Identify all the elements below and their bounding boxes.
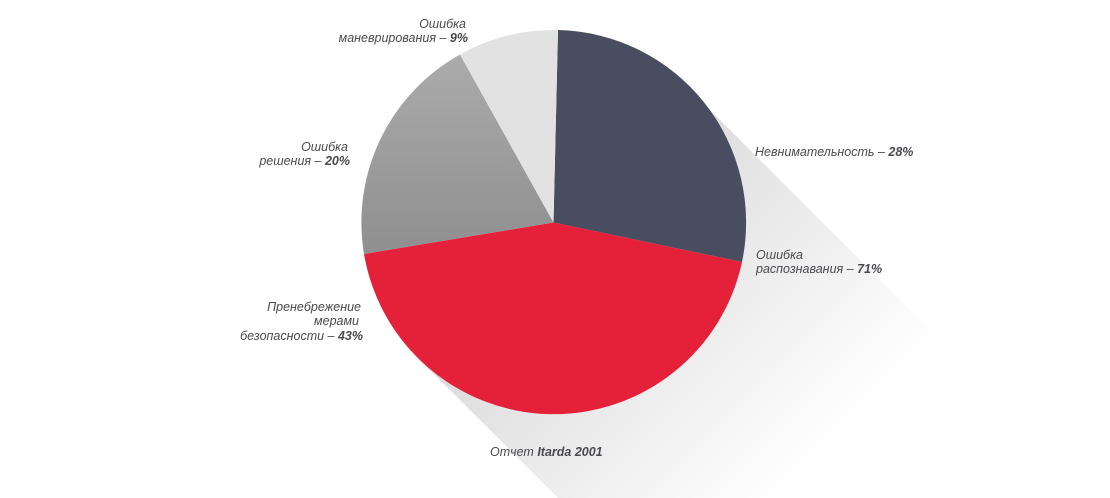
label: decision error: Ошибка [301,140,348,154]
label: decision error [258,140,350,168]
label: safety neglect: безопасности – 43% [240,329,363,343]
label: decision error: решения – 20% [258,154,350,168]
slice: inattention 28% [554,30,746,262]
slice: decision error 20% [361,54,554,254]
label: safety neglect: мерами [314,314,359,328]
slice: safety neglect 43% [364,222,742,414]
label: maneuvering error: Ошибка [419,17,466,31]
label: maneuvering error: маневрирования – 9% [339,31,468,45]
pie chart [361,30,746,414]
label: inattention: Невнимательность – 28% [755,145,913,159]
label: safety neglect: Пренебрежение [267,300,361,314]
label: recognition error: Ошибка [756,248,803,262]
label: recognition error [755,248,882,276]
label: recognition error: распознавания – 71% [755,262,882,276]
label: safety neglect [240,300,363,343]
label: maneuvering error [339,17,468,45]
slice: maneuvering error 9% [460,30,558,222]
source note: Отчет Itarda 2001 [490,445,603,459]
long drop shadow [417,90,960,498]
